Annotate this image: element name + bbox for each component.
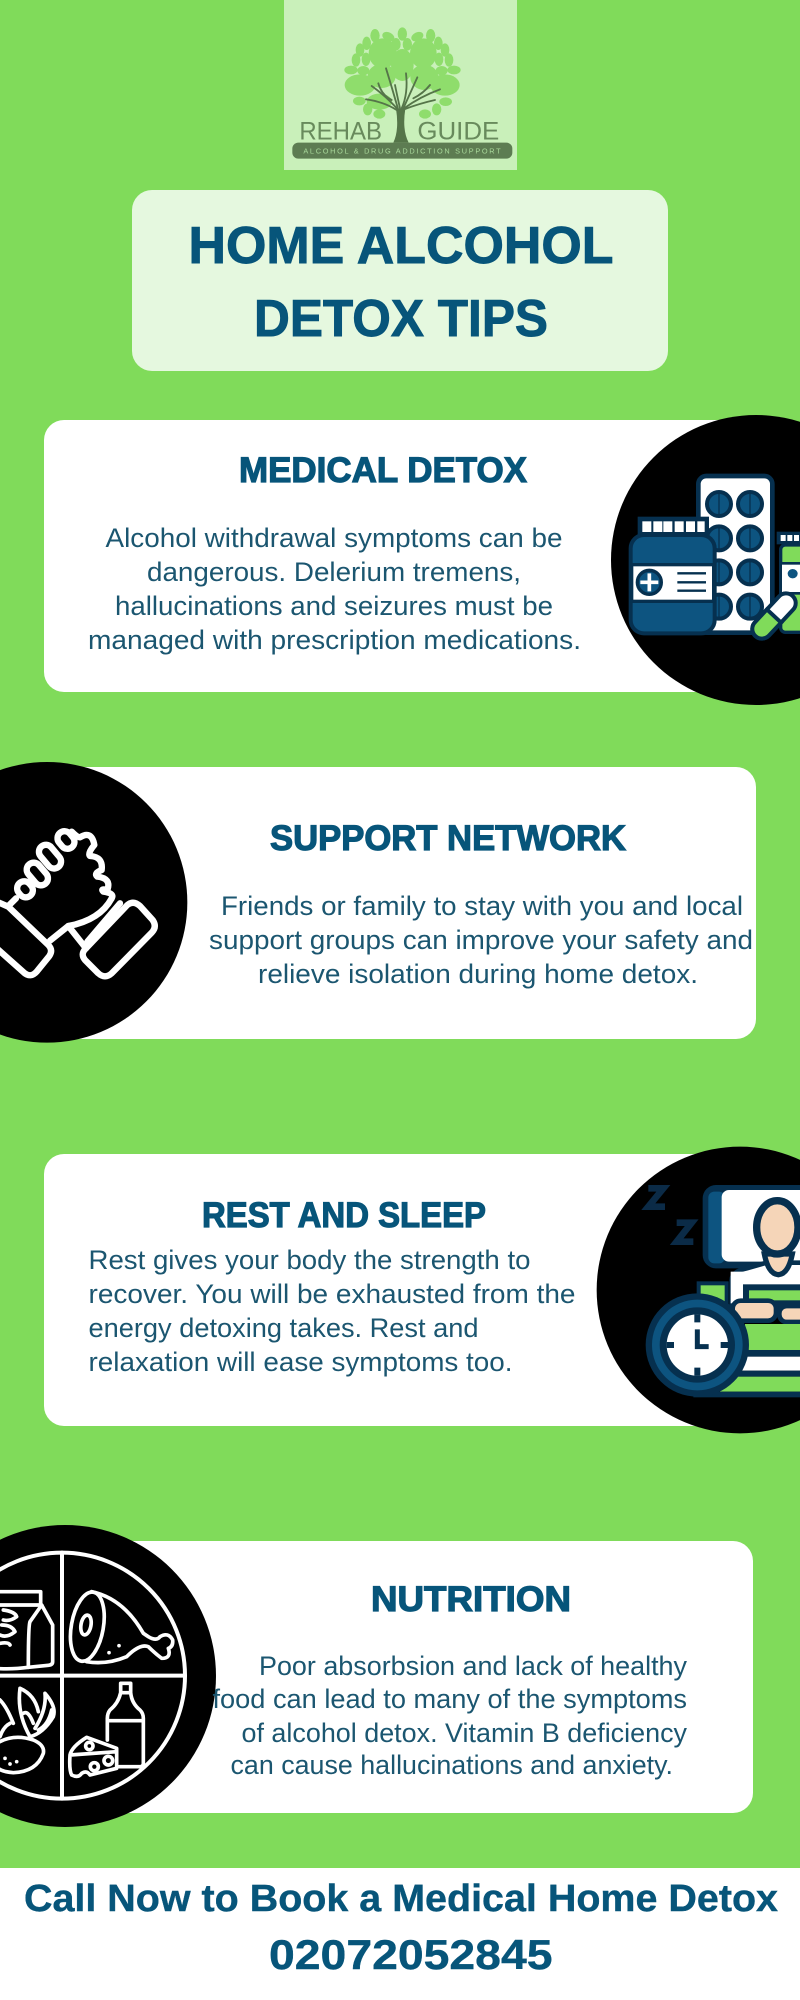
text: nutrition body: food can lead to many of the symptoms (212, 1684, 687, 1714)
text: medical detox body: Alcohol withdrawal symptoms can be (106, 523, 562, 553)
text: support network body: Friends or family to stay with you and local (221, 891, 743, 921)
text: medical detox body: hallucinations and seizures must be (115, 591, 553, 621)
text: support network body: relieve isolation during home detox. (258, 959, 698, 989)
text: medical detox body: dangerous. Delerium tremens, (147, 557, 521, 587)
footer: call to action (0, 1868, 800, 2000)
text: medical detox body: managed with prescription medications. (88, 625, 581, 655)
title panel (132, 190, 668, 371)
text: nutrition body (212, 1651, 687, 1780)
heading: rest and sleep: REST AND SLEEP (202, 1196, 486, 1235)
heading: nutrition: NUTRITION (371, 1580, 571, 1619)
icon: sleep and clock (597, 1147, 800, 1433)
logo: Rehab Guide: ALCOHOL & DRUG ADDICTION SUPPORT (303, 146, 501, 155)
panel: medical detox (44, 415, 800, 705)
title: DETOX TIPS (254, 290, 548, 348)
text: rest and sleep body: recover. You will be exhausted from the (88, 1279, 576, 1309)
text: medical detox body (88, 523, 581, 655)
text: support network body (209, 891, 753, 989)
panel: rest and sleep (44, 1147, 800, 1433)
text: nutrition body: of alcohol detox. Vitamin B deficiency (242, 1718, 687, 1748)
phone number: 02072052845 (269, 1931, 552, 1978)
text: nutrition body: can cause hallucinations and anxiety. (230, 1750, 673, 1780)
panel: support network (0, 762, 756, 1043)
icon: food plate (0, 1525, 216, 1827)
icon: medication (611, 415, 800, 705)
logo: Rehab Guide: REHAB (299, 118, 382, 145)
text: rest and sleep body (88, 1245, 576, 1377)
panel: nutrition (0, 1525, 753, 1827)
text: nutrition body: Poor absorbsion and lack of healthy (259, 1651, 687, 1681)
title (188, 217, 614, 348)
text: rest and sleep body: energy detoxing takes. Rest and (88, 1313, 478, 1343)
title: HOME ALCOHOL (188, 217, 614, 275)
text: rest and sleep body: Rest gives your body the strength to (88, 1245, 530, 1275)
icon: handshake (0, 762, 187, 1043)
heading: medical detox: MEDICAL DETOX (239, 451, 528, 490)
heading: support network: SUPPORT NETWORK (270, 819, 626, 858)
logo: Rehab Guide: GUIDE (417, 118, 499, 145)
call to action text: Call Now to Book a Medical Home Detox (24, 1878, 778, 1920)
logo: Rehab Guide (284, 0, 517, 170)
text: rest and sleep body: relaxation will ease symptoms too. (88, 1347, 512, 1377)
text: support network body: support groups can improve your safety and (209, 925, 753, 955)
